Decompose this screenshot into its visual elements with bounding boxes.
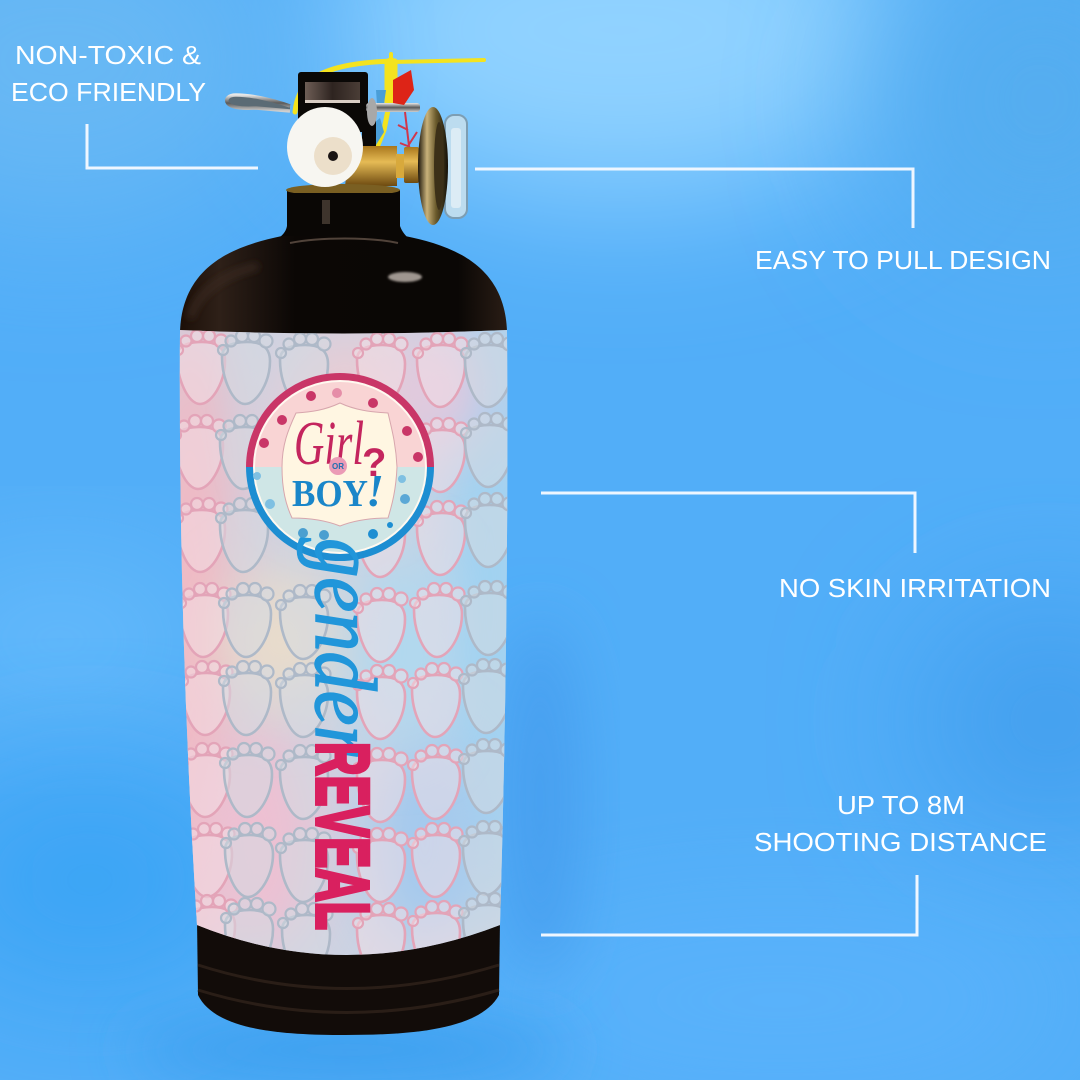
grey footprints [216, 330, 516, 977]
callout text: non-toxic and eco friendly: ECO FRIENDLY [11, 77, 206, 107]
blue clip fragments [368, 90, 386, 145]
callout text: shooting distance: SHOOTING DISTANCE [754, 827, 1047, 857]
question mark: ? [362, 441, 386, 485]
head block [298, 72, 376, 150]
callout line: non-toxic [87, 124, 258, 168]
black dome top [180, 236, 507, 336]
badge discs [246, 373, 434, 561]
valve assembly [227, 54, 484, 240]
girl or boy badge [246, 373, 434, 561]
callout text: non-toxic and eco friendly [11, 40, 206, 107]
cream plaque [282, 403, 397, 526]
yellow safety seal [295, 54, 484, 145]
red tag [393, 70, 414, 105]
callout text: shooting distance: UP TO 8M [837, 790, 965, 820]
callout text: easy to pull design: EASY TO PULL DESIGN [755, 245, 1051, 275]
watercolor backdrop [180, 330, 508, 955]
callout line: easy to pull [475, 169, 913, 228]
callout line: shooting distance [541, 875, 917, 935]
callout text: shooting distance [754, 790, 1047, 857]
red strand [398, 112, 417, 147]
pink footprints [171, 330, 468, 977]
neck [276, 184, 410, 240]
exclamation mark: ! [366, 465, 384, 516]
black base [197, 920, 500, 1035]
or dot: OR [332, 462, 344, 471]
extinguisher bottle [180, 52, 508, 1035]
pull pin [366, 98, 420, 126]
white nozzle [287, 107, 363, 187]
boy lettering: BOY [292, 473, 368, 515]
callout text: non-toxic and eco friendly: NON-TOXIC & [15, 40, 201, 70]
pressure gauge [418, 107, 467, 225]
reveal vertical lettering: REVEAL [301, 742, 384, 930]
callout text: no skin irritation: NO SKIN IRRITATION [779, 573, 1051, 603]
gender vertical script: gender [296, 538, 393, 757]
or dot [329, 457, 347, 475]
girl lettering: Girl [294, 410, 364, 478]
baby icons ring [253, 388, 423, 540]
callout line: no skin irritation [541, 493, 915, 553]
pull ring [227, 95, 290, 111]
printed label [180, 330, 508, 955]
brass connector [345, 146, 419, 186]
